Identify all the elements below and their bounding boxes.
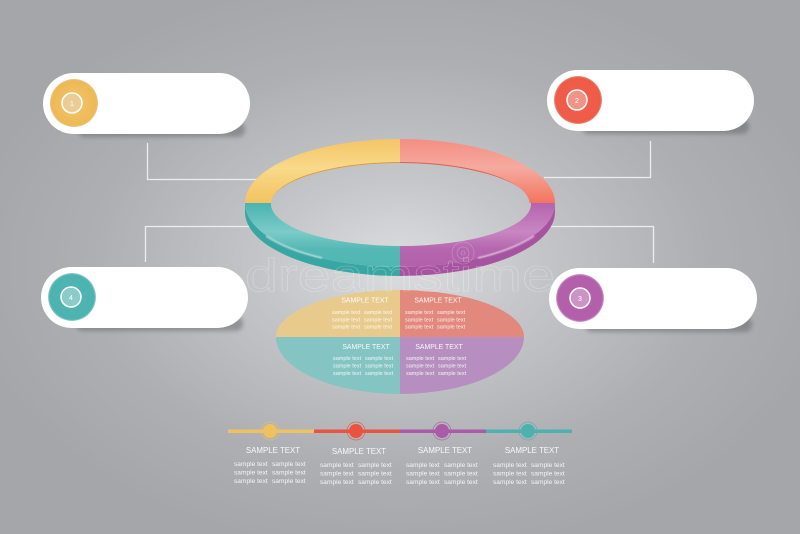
oval quadrant: yellow [276,290,400,337]
timeline text 4: sample text [493,479,527,486]
timeline text 2: sample text [358,470,392,478]
oval text: purple [406,344,467,377]
oval text: purple: sample text [406,364,435,370]
timeline text 1: sample text [272,461,306,468]
oval text: teal: sample text [365,371,394,377]
timeline text 4: SAMPLE TEXT [505,446,559,455]
timeline text 3: SAMPLE TEXT [418,446,472,455]
timeline [228,422,572,440]
oval text: teal: sample text [333,364,362,370]
oval text: yellow: SAMPLE TEXT [341,298,389,304]
timeline segment: yellow [228,422,314,440]
oval quadrant: red [400,290,524,337]
timeline text 1: SAMPLE TEXT [246,446,300,455]
icon: yellow badge 1: 1 [70,101,74,108]
timeline segment: red [314,422,400,440]
oval text: yellow: sample text [332,310,361,316]
timeline text 1 [234,446,306,485]
ring side: teal [245,203,400,276]
icon: purple badge 3: 3 [578,296,582,303]
oval text: red: sample text [437,324,466,330]
timeline text 4: sample text [531,470,565,478]
card: bottom right [549,268,757,332]
timeline text 4: sample text [493,462,527,469]
ring segment: red [400,139,555,203]
ring inner lip: yellow [271,160,400,204]
timeline text 1: sample text [234,478,268,485]
oval text: teal: SAMPLE TEXT [342,344,390,351]
icon: teal badge 4: 4 [69,295,73,302]
timeline text 3: sample text [444,479,478,486]
oval text: red: sample text [405,324,434,330]
timeline text 3: sample text [406,479,440,486]
oval text: red: sample text [405,310,434,316]
watermark: dreamstime [245,249,555,301]
oval quadrant: teal [276,337,400,394]
oval text: teal: sample text [333,356,362,362]
oval text: yellow: sample text [364,324,393,330]
timeline text 2: sample text [320,462,354,469]
oval text: yellow: sample text [364,318,393,324]
oval text: red: SAMPLE TEXT [414,298,462,304]
timeline text 2: sample text [320,479,354,486]
oval text: red [405,298,466,330]
oval text: yellow: sample text [364,310,393,316]
timeline text 2: sample text [358,462,392,469]
oval text: purple: sample text [438,356,467,362]
oval text: purple: SAMPLE TEXT [415,344,463,351]
icon: red badge 2 [554,76,602,124]
icon: red badge 2: 2 [575,98,579,105]
timeline text 3 [406,446,478,486]
ring highlights [266,236,534,258]
timeline text 4: sample text [493,470,527,478]
timeline text 1: sample text [234,461,268,468]
timeline text 4: sample text [531,479,565,486]
timeline text 3: sample text [444,462,478,469]
oval text: yellow: sample text [332,324,361,330]
3D ring [245,139,555,276]
timeline text 1: sample text [234,470,268,476]
oval text: red: sample text [405,318,434,324]
oval text: red: sample text [437,318,466,324]
lower oval with text [276,290,524,394]
oval quadrant: purple [400,337,524,394]
oval text: purple: sample text [438,371,467,377]
timeline text 1: sample text [272,478,306,485]
oval text: teal: sample text [333,371,362,377]
timeline segment: purple [400,422,486,440]
timeline text 3: sample text [406,462,440,469]
ring inner lip: red [400,160,531,204]
ring segment: yellow [245,139,400,204]
timeline text 2: SAMPLE TEXT [332,447,386,456]
oval text: purple: sample text [406,356,435,362]
ring side: purple [400,203,555,276]
connector lines [146,141,654,263]
card: top left [43,73,250,137]
timeline segment: teal [486,422,572,440]
icon: teal badge 4 [48,273,96,321]
oval text: teal: sample text [365,364,394,370]
timeline text 3: sample text [444,470,478,478]
icon: purple badge 3 [556,274,604,322]
oval text: teal: sample text [365,356,394,362]
timeline text 1: sample text [272,470,306,476]
oval text: yellow: sample text [332,318,361,324]
oval text: purple: sample text [438,364,467,370]
timeline text 2 [320,447,392,486]
ring segment: teal [245,203,400,267]
oval text: purple: sample text [406,371,435,377]
icon: yellow badge 1 [50,79,98,127]
watermark [245,242,555,301]
card: top right [547,70,754,134]
timeline text 4: sample text [531,462,565,469]
oval text: teal [333,344,394,377]
ring segment: purple [400,203,555,267]
timeline text 2: sample text [358,479,392,486]
timeline text 3: sample text [406,470,440,478]
oval text: yellow [332,298,393,330]
timeline text 2: sample text [320,470,354,478]
oval text: red: sample text [437,310,466,316]
timeline text 4 [493,446,565,486]
card: bottom left [41,267,248,331]
